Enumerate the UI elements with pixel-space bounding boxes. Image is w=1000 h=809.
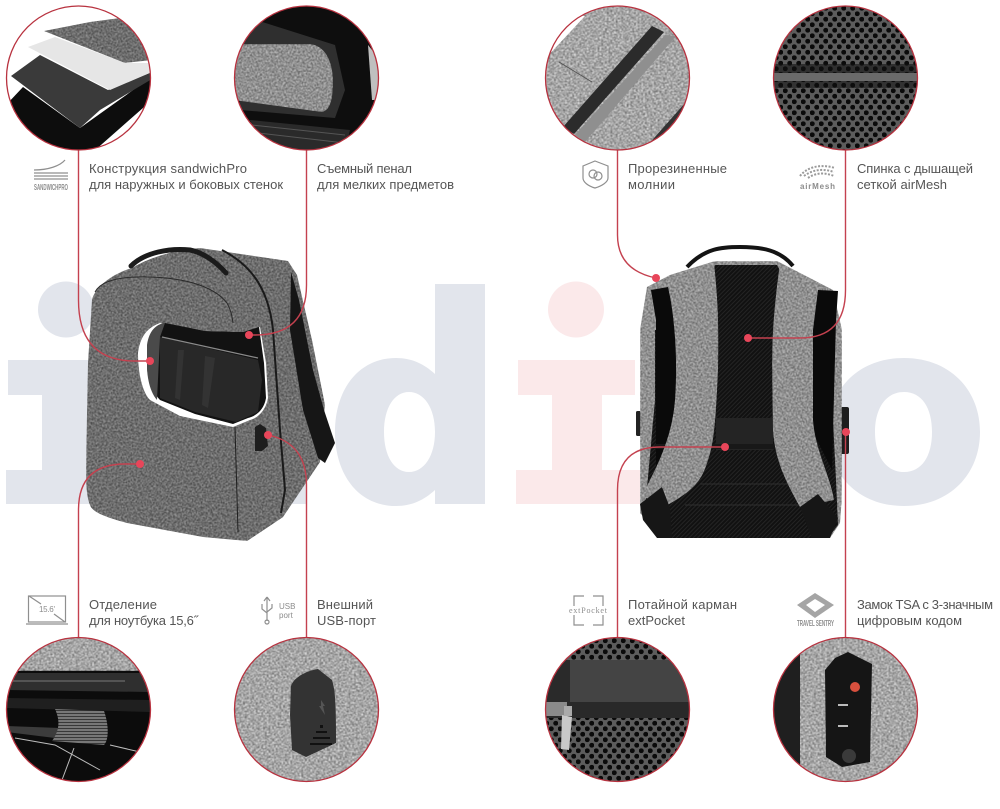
text: USB port: Внешний xyxy=(317,597,373,612)
text: extPocket xyxy=(628,597,737,628)
left shoulder strap xyxy=(642,263,718,507)
text: zippers: Прорезиненные xyxy=(628,161,727,176)
black back panel xyxy=(645,265,838,538)
marker: USB port xyxy=(264,431,272,439)
marker: extPocket xyxy=(721,443,729,451)
icon: USB: USB xyxy=(279,602,295,611)
text: USB port xyxy=(317,597,376,628)
text: laptop compartment xyxy=(89,597,200,628)
marker: airMesh xyxy=(744,334,752,342)
lower padding lines xyxy=(685,484,800,505)
main body texture xyxy=(86,248,283,541)
marker: sandwichPro xyxy=(146,357,154,365)
left buckle xyxy=(640,487,672,538)
feature: extPocket xyxy=(569,596,737,628)
feature: rubberized zippers xyxy=(583,161,727,192)
feature: sandwichPro xyxy=(34,160,283,192)
marker: pencil case xyxy=(245,331,253,339)
icon: laptop 15.6: 15.6' xyxy=(39,605,55,614)
open pocket lining xyxy=(147,323,266,424)
feature: pencil case: для мелких предметов xyxy=(317,177,454,192)
detail circle: sandwichPro layers xyxy=(6,6,152,152)
connector: extPocket xyxy=(618,447,725,638)
zipper line xyxy=(222,250,285,513)
right shoulder strap xyxy=(772,263,834,507)
text: TSA lock: цифровым кодом xyxy=(857,613,962,628)
detail circle: laptop compartment xyxy=(6,637,151,782)
text: airMesh xyxy=(857,161,973,192)
connector: zippers xyxy=(618,150,656,278)
lower back band xyxy=(716,418,773,450)
text: airMesh: сеткой airMesh xyxy=(857,177,947,192)
detail circle: hidden extPocket xyxy=(545,637,690,782)
zipper band xyxy=(655,444,775,449)
marker: zippers xyxy=(652,274,660,282)
top handle xyxy=(687,247,793,267)
letter i, blue-gray xyxy=(6,282,130,504)
front view of backpack xyxy=(86,248,335,541)
letter hidden behind the front backpack, blue-gray xyxy=(150,360,307,504)
background wordmark: indio xyxy=(6,282,980,506)
text: USB port: USB-порт xyxy=(317,613,376,628)
detail circle: USB port xyxy=(234,637,379,782)
connector: airMesh xyxy=(748,150,846,338)
icon: Travel Sentry xyxy=(797,593,834,628)
icon: Travel Sentry: TRAVEL SENTRY xyxy=(797,619,834,628)
icon: extPocket: extPocket xyxy=(569,606,608,615)
feature: pencil case xyxy=(317,161,454,192)
connector: USB port xyxy=(268,435,306,638)
inner mesh pocket xyxy=(160,337,262,422)
right buckle xyxy=(800,494,838,538)
icon: sandwichPro xyxy=(34,160,68,192)
icon: extPocket xyxy=(569,596,608,625)
text: extPocket: Потайной карман xyxy=(628,597,737,612)
connector: laptop compartment xyxy=(78,464,140,638)
connector: pencil case xyxy=(249,150,306,335)
text: laptop compartment: для ноутбука 15,6˝ xyxy=(89,613,200,628)
detail circle: removable pencil case xyxy=(234,6,380,150)
text: airMesh: Спинка с дышащей xyxy=(857,161,973,176)
text: sandwichPro xyxy=(89,161,283,192)
feature: TSA lock xyxy=(797,593,993,628)
text: zippers: молнии xyxy=(628,177,675,192)
marker: laptop compartment xyxy=(136,460,144,468)
detail circle: airMesh back xyxy=(773,6,918,150)
front panel outline xyxy=(95,277,233,323)
feature: airMesh xyxy=(800,161,973,192)
back body texture xyxy=(640,261,842,538)
letter d, blue-gray xyxy=(335,284,485,506)
TSA lock edge xyxy=(840,407,849,454)
top handle xyxy=(131,250,226,273)
back view of backpack xyxy=(636,247,849,538)
detail circle: rubberized zippers xyxy=(544,6,692,150)
connector lines and markers xyxy=(78,150,850,638)
lower seam xyxy=(235,427,238,532)
USB cap edge xyxy=(636,411,641,436)
icon: airMesh xyxy=(800,166,835,191)
pocket zip xyxy=(162,337,258,358)
detail circle: TSA combination lock xyxy=(773,637,918,782)
side shoulder strap xyxy=(290,272,335,463)
armhole shadows xyxy=(651,287,838,470)
connector: sandwichPro xyxy=(78,150,150,361)
text: TSA lock xyxy=(857,597,993,628)
icon: USB: port xyxy=(279,611,294,620)
open pocket white rim xyxy=(138,323,268,427)
side outer fabric xyxy=(200,248,325,541)
USB cap on side xyxy=(255,424,268,451)
text: extPocket: extPocket xyxy=(628,613,685,628)
icon: shield with drops xyxy=(583,161,608,188)
pocket inner flap edge xyxy=(147,323,165,400)
feature: pencil case: Съемный пенал xyxy=(317,161,412,176)
icon: sandwichPro: SANDWICHPRO xyxy=(34,183,68,192)
letter i, pale pink xyxy=(516,282,640,504)
text: zippers xyxy=(628,161,727,192)
pocket lining folds xyxy=(175,350,215,408)
icon: USB xyxy=(262,597,295,624)
feature: USB port xyxy=(262,597,376,628)
text: sandwichPro: Конструкция sandwichPro xyxy=(89,161,247,176)
icon: airMesh: airMesh xyxy=(800,182,835,191)
text: TSA lock: Замок TSA с 3-значным xyxy=(857,597,993,612)
text: laptop compartment: Отделение xyxy=(89,597,157,612)
text: sandwichPro: для наружных и боковых стенок xyxy=(89,177,283,192)
marker: TSA lock xyxy=(842,428,850,436)
connector: TSA lock xyxy=(844,432,846,638)
letter o, blue-gray xyxy=(828,358,980,506)
icon: laptop 15.6 xyxy=(26,596,68,624)
feature: laptop compartment xyxy=(26,596,200,628)
